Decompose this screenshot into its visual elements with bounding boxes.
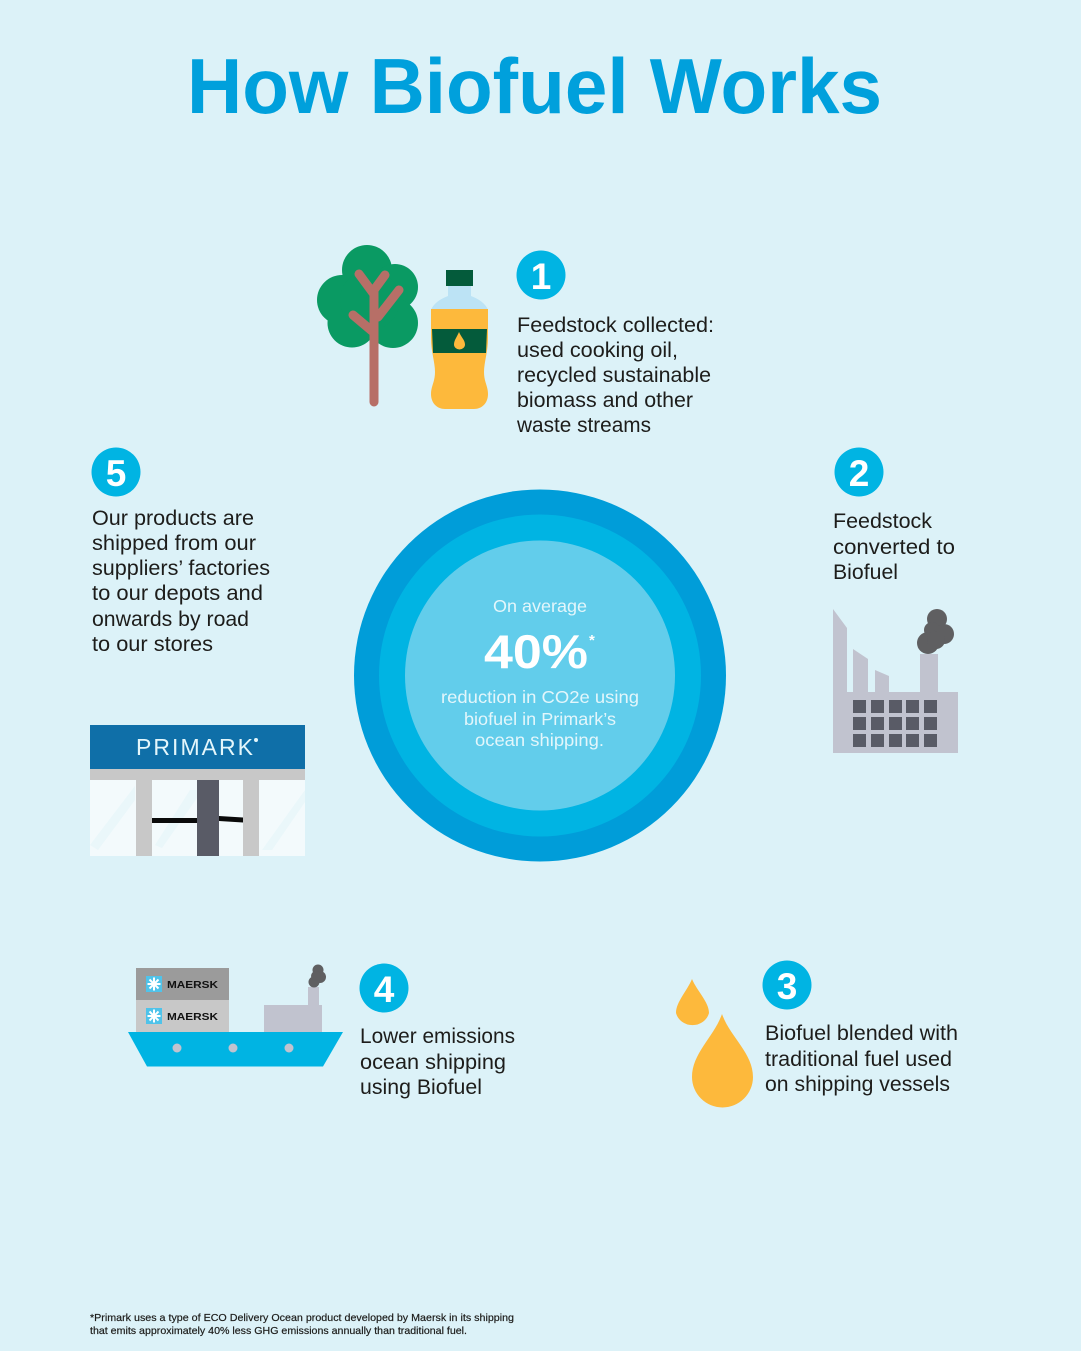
step 4 text: Lower emissions — [360, 1024, 515, 1048]
central circle: 40% statistic: 40% — [484, 625, 588, 678]
step 2 text: Biofuel — [833, 560, 898, 584]
step 1 text: waste streams — [516, 413, 651, 437]
number badge 5 — [92, 448, 140, 496]
step 4 text: using Biofuel — [360, 1075, 482, 1099]
icon: oil bottle — [431, 270, 488, 409]
number badge 2: 2 — [849, 453, 869, 494]
step 5 text: onwards by road — [92, 607, 249, 631]
step 3 text — [765, 1021, 958, 1096]
step 4 text: ocean shipping — [360, 1050, 506, 1074]
central circle: 40% statistic — [354, 490, 726, 862]
step 3 text: on shipping vessels — [765, 1072, 950, 1096]
icon: factory — [833, 609, 958, 753]
icon: fuel drops — [676, 979, 753, 1107]
step 1 text: Feedstock collected: — [517, 313, 714, 337]
step 5 text — [92, 506, 270, 656]
step 5 text: suppliers’ factories — [92, 556, 270, 580]
step 2 — [833, 448, 955, 584]
central circle: 40% statistic: reduction in CO2e using — [441, 687, 639, 707]
icon: container ship — [128, 964, 343, 1066]
step 2 text — [833, 509, 955, 584]
step 3 — [762, 960, 958, 1096]
title: How Biofuel Works — [187, 42, 882, 130]
number badge 3 — [762, 960, 812, 1010]
step 3 text: Biofuel blended with — [765, 1021, 958, 1045]
icon: container ship: MAERSK — [167, 1011, 218, 1023]
number badge 1: 1 — [531, 256, 551, 297]
number badge 1 — [516, 250, 566, 300]
step 5 text: shipped from our — [92, 531, 256, 555]
step 3 text: traditional fuel used — [765, 1047, 952, 1071]
footnote — [90, 1312, 514, 1337]
step 5 text: to our depots and — [92, 581, 263, 605]
step 1 text: recycled sustainable — [517, 363, 711, 387]
step 2 text: converted to — [833, 535, 955, 559]
step 1 text: used cooking oil, — [517, 338, 678, 362]
icon: Primark store — [90, 725, 305, 856]
number badge 5: 5 — [106, 453, 126, 494]
central circle: 40% statistic: On average — [493, 596, 587, 616]
central circle: 40% statistic: ocean shipping. — [475, 730, 604, 750]
step 5 — [92, 448, 270, 656]
icon: Primark store: PRIMARK — [136, 734, 254, 760]
step 5 text: to our stores — [92, 632, 213, 656]
footnote: *Primark uses a type of ECO Delivery Ocean product developed by Maersk in its shipping — [90, 1312, 514, 1324]
step 4 text — [360, 1024, 515, 1099]
central circle: 40% statistic: * — [589, 632, 595, 649]
step 1 text: biomass and other — [517, 388, 693, 412]
step 2 text: Feedstock — [833, 509, 932, 533]
icon: tree — [317, 245, 418, 402]
step 4 — [360, 964, 515, 1099]
number badge 3: 3 — [777, 966, 797, 1007]
footnote: that emits approximately 40% less GHG emissions annually than traditional fuel. — [90, 1325, 467, 1337]
central circle: 40% statistic: biofuel in Primark’s — [464, 709, 616, 729]
step 5 text: Our products are — [92, 506, 254, 530]
step 1 — [516, 250, 714, 437]
icon: container ship: MAERSK — [167, 979, 218, 991]
number badge 4 — [360, 964, 408, 1012]
step 1 text — [516, 313, 714, 437]
number badge 4: 4 — [374, 969, 395, 1010]
